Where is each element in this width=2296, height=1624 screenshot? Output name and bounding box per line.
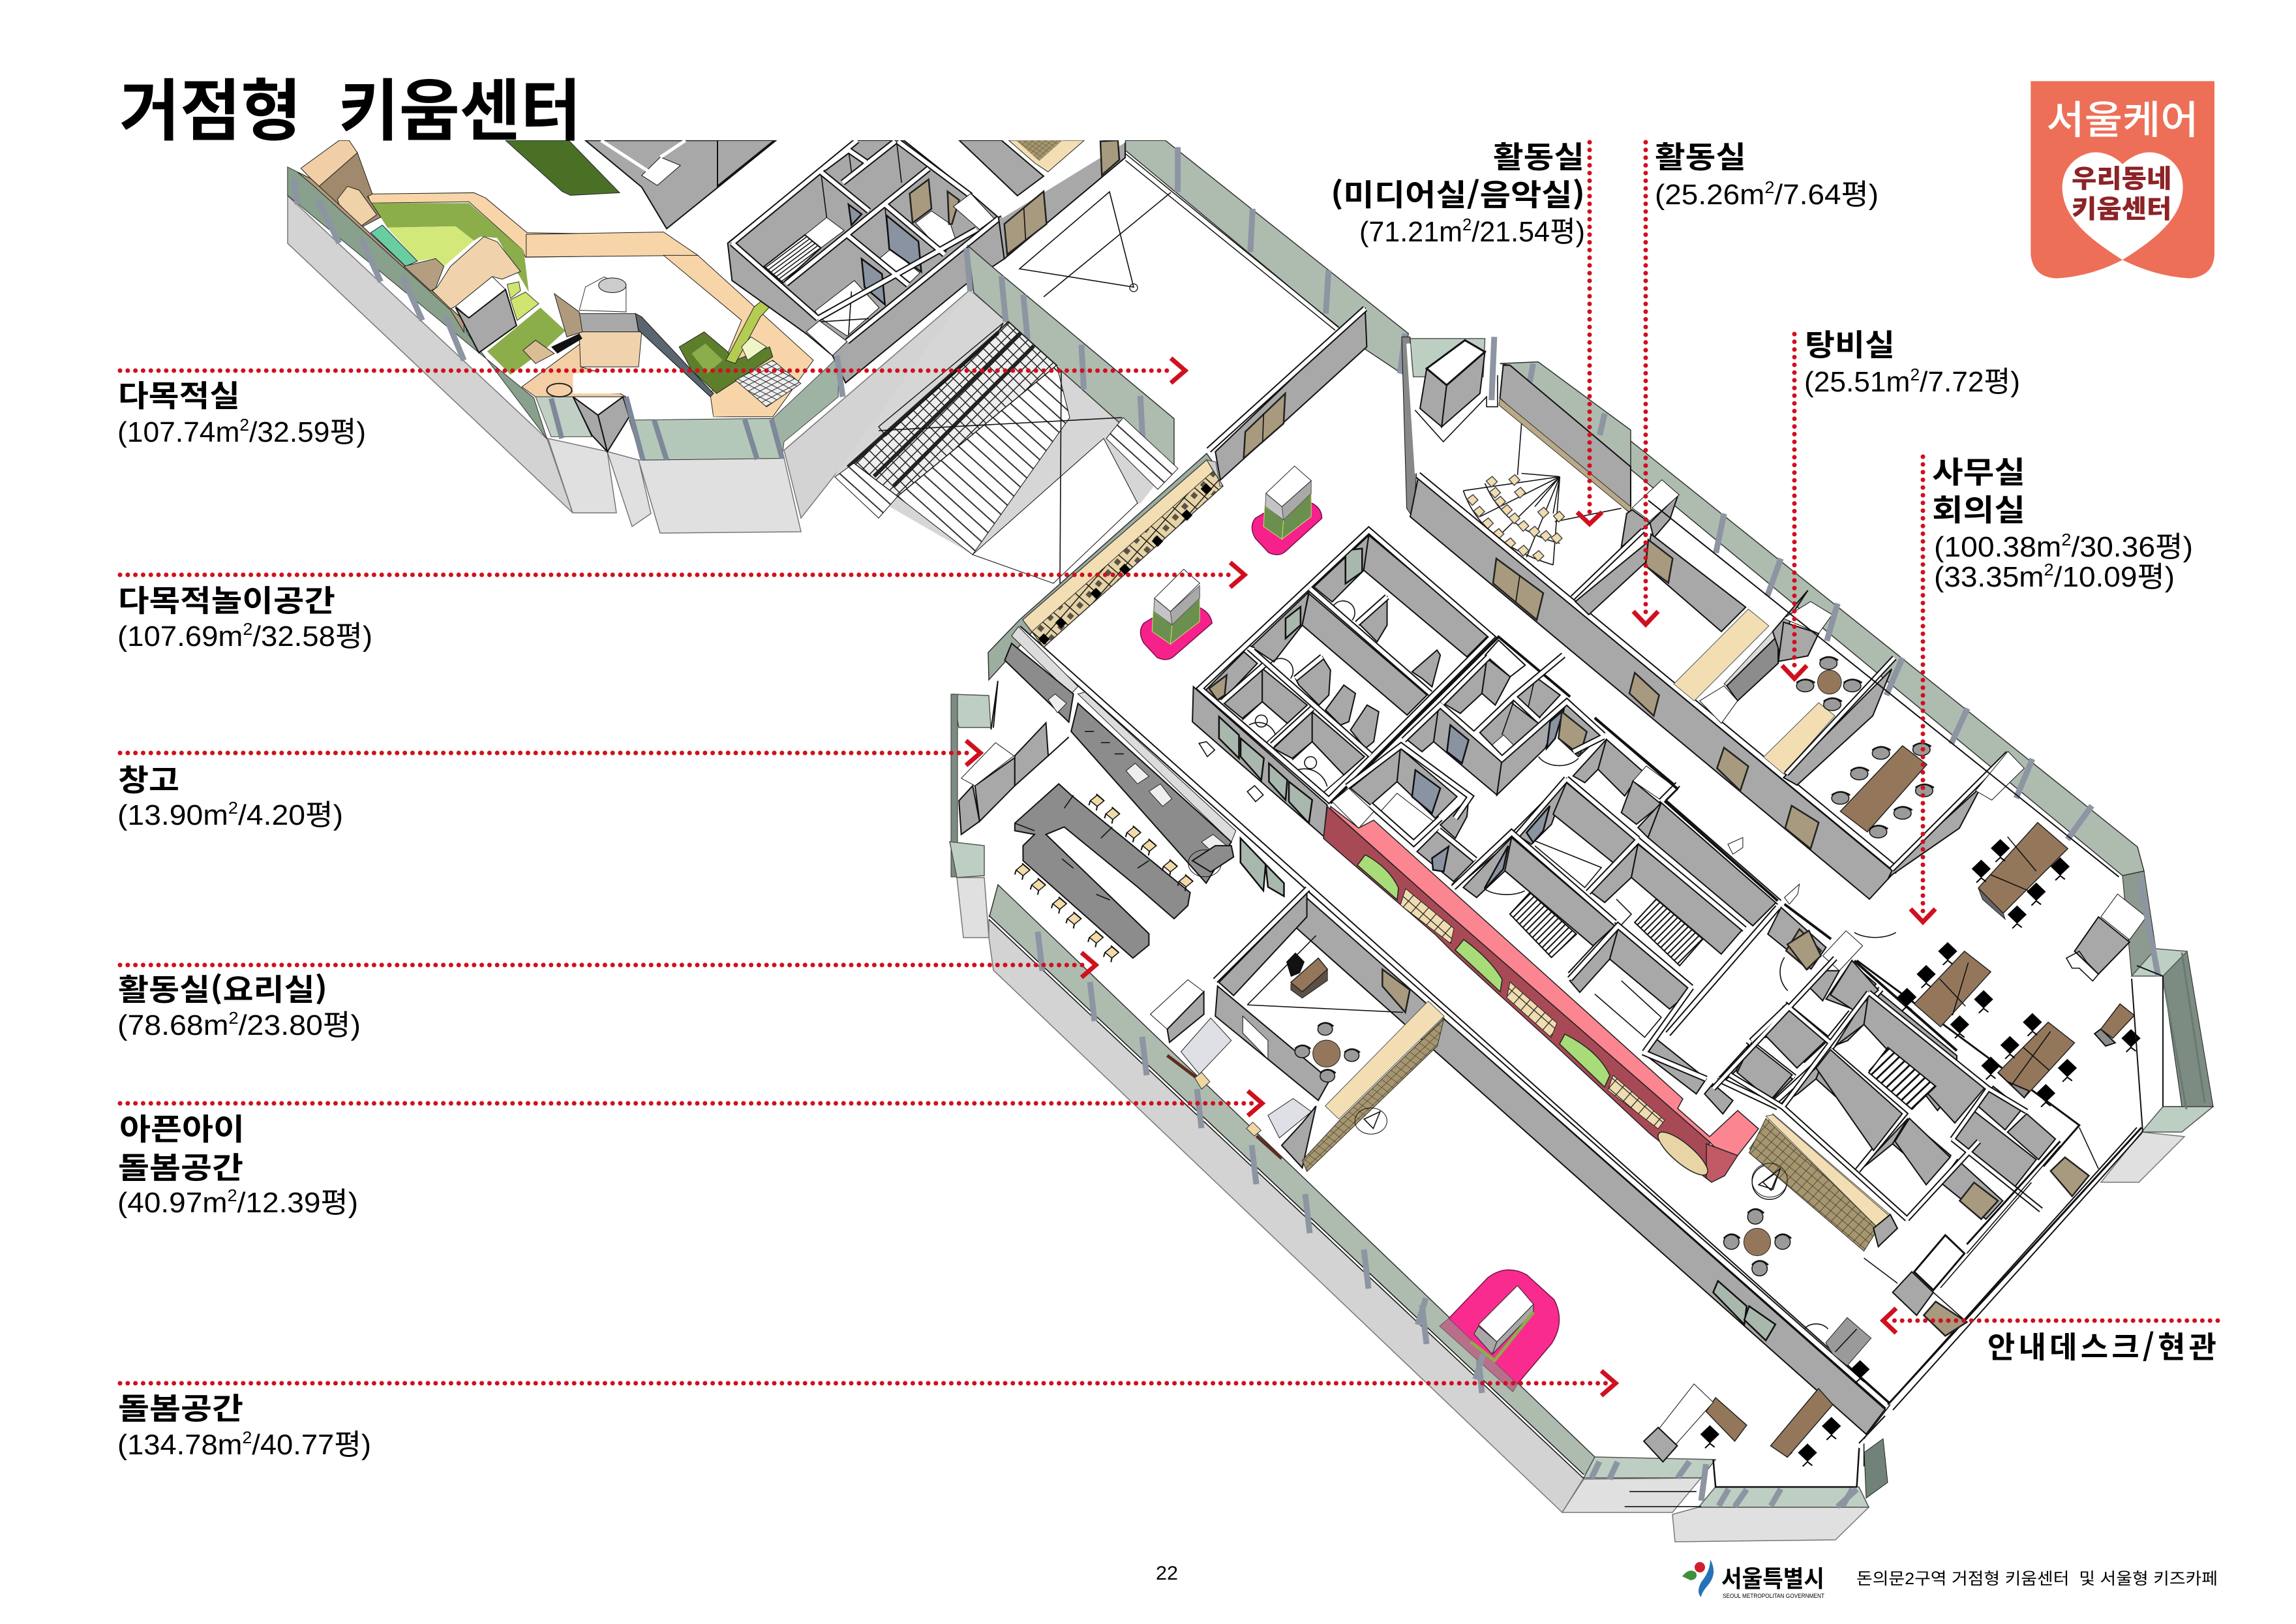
label: 창고: 창고 [118, 757, 179, 800]
label: 다목적놀이공간: 다목적놀이공간 [118, 577, 335, 620]
label: 활동실 미디어실 음악실: (미디어실/음악실) [1331, 172, 1585, 215]
logo: 서울케어 우리동네 키움센터 [2031, 81, 2214, 279]
arrow: 미디어실 [1577, 142, 1602, 524]
footer caption: 돈의문2구역 거점형 키움센터 및 서울형 키즈카페 [1856, 1570, 2218, 1588]
label: 돌봄공간 [117, 1385, 371, 1461]
kitchen activity room: counters, island, chairs [959, 626, 1284, 962]
page number: 22 [1156, 1563, 1178, 1584]
logo: 서울특별시: 서울특별시 [1721, 1560, 1824, 1594]
logo: 서울케어 우리동네 키움센터: 우리동네 [2072, 158, 2171, 195]
core: restrooms block [1192, 530, 1492, 836]
upper void side: glass band and partition wall [1126, 140, 1631, 565]
label: 탕비실: 탕비실 [1805, 322, 1895, 365]
pink play pillars [1140, 466, 1322, 660]
label: 사무실 회의실: 회의실 [1932, 487, 2025, 530]
label: 아픈아이 돌봄공간: (40.97m [117, 1187, 222, 1219]
label: 탕비실 [1804, 322, 2020, 398]
label: 돌봄공간: 돌봄공간 [118, 1385, 243, 1428]
stair-room floor markings [1020, 192, 1171, 297]
long corridor wall and double-door [1018, 475, 1898, 1434]
playground room: wooden structure, greens and peach floor [288, 140, 620, 439]
label: 안내데스크/현관: 안내데스크/현관 [1987, 1324, 2216, 1367]
label: 다목적놀이공간: (107.69m [117, 620, 239, 652]
label: 창고: /4.20평) [238, 799, 343, 831]
office, lobby, reception [1609, 823, 2158, 1507]
label: 사무실 회의실: 2 [2061, 530, 2072, 549]
arrow: 아픈아이 돌봄공간 [120, 1091, 1262, 1116]
label: 활동실(요리실): (78.68m [117, 1009, 222, 1041]
label: 사무실 회의실: (100.38m [1934, 531, 2055, 563]
playground central structure: tube slide, panels, grid [522, 140, 838, 460]
label: 사무실 회의실: 2 [2044, 560, 2054, 579]
label: 아픈아이 돌봄공간: 돌봄공간 [118, 1144, 243, 1187]
label: 활동실: 2 [1764, 177, 1774, 197]
label: 다목적놀이공간: 2 [243, 619, 252, 639]
label: 사무실 회의실: 사무실 [1932, 449, 2025, 492]
label: 다목적실: 2 [239, 415, 249, 435]
label: 활동실 미디어실 음악실: 활동실 [1493, 134, 1584, 177]
label: 다목적실: 다목적실 [118, 373, 240, 416]
upper rest rooms and stairs block [718, 140, 1174, 472]
label: 돌봄공간: /40.77평) [252, 1429, 371, 1461]
label: 활동실(요리실): 활동실(요리실) [118, 966, 327, 1009]
label: 창고: 2 [228, 798, 238, 818]
arrow: 사무실 회의실 [1911, 457, 1935, 922]
label: 탕비실: (25.51m [1804, 366, 1909, 398]
bookshelf wall beside hall [1023, 460, 1223, 647]
label: 활동실: (25.26m [1655, 179, 1760, 211]
label: 다목적실: (107.74m [117, 416, 239, 448]
label: 아픈아이 돌봄공간 [117, 1106, 358, 1219]
core: stair rooms [1453, 718, 1957, 1240]
arrow: 활동실 요리실 [120, 953, 1096, 977]
label: 탕비실: 2 [1910, 365, 1920, 384]
logo: 서울케어 우리동네 키움센터: 키움센터 [2072, 189, 2171, 226]
label: 사무실 회의실: (33.35m [1934, 561, 2039, 593]
label: 돌봄공간: 2 [242, 1428, 252, 1447]
logo: 서울특별시 [1682, 1559, 1824, 1599]
label: 사무실 회의실: /10.09평) [2054, 561, 2175, 593]
logo: 서울케어 우리동네 키움센터: 서울케어 [2046, 89, 2199, 146]
label: 돌봄공간: (134.78m [117, 1429, 239, 1461]
right glass mullions [2132, 953, 2205, 1132]
arrow: 탕비실 [1782, 334, 1807, 679]
arrow: 다목적실 [120, 358, 1185, 383]
title: 거점형 키움센터 [119, 57, 581, 154]
label: 아픈아이 돌봄공간: 아픈아이 [119, 1106, 245, 1149]
arrow: 안내데스크 현관 [1883, 1308, 2218, 1333]
arrow: 활동실 [1633, 142, 1658, 624]
label: 활동실(요리실) [117, 966, 361, 1041]
floor plan: isometric axonometric view [288, 140, 2213, 1542]
pink feature wall with arches and shelves [1323, 806, 1759, 1182]
label: 활동실 [1655, 134, 1879, 211]
media room second room and tea room and meeting room [1573, 480, 2119, 877]
label: 탕비실: /7.72평) [1920, 366, 2020, 398]
label: 활동실: /7.64평) [1774, 179, 1879, 211]
label: 아픈아이 돌봄공간: /12.39평) [237, 1187, 358, 1219]
core: centre rooms [1331, 637, 1678, 975]
label: 창고 [117, 757, 343, 831]
label: 창고: (13.90m [117, 799, 222, 831]
label: 다목적놀이공간 [117, 577, 372, 652]
label: 사무실 회의실 [1932, 449, 2193, 593]
arrow: 다목적놀이공간 [120, 562, 1245, 587]
arrow: 창고 [120, 741, 980, 765]
label: 활동실(요리실): 2 [228, 1008, 239, 1028]
main stairs with gridded tread mesh over void [835, 322, 1178, 583]
big pink play structure in care room [1417, 1270, 1559, 1392]
arrow: 돌봄공간 [120, 1371, 1616, 1396]
sick child care room: beds, desk, round table [1151, 889, 1444, 1172]
label: 활동실 미디어실 음악실: (71.21m [1359, 216, 1464, 248]
label: 다목적놀이공간: /32.58평) [252, 620, 372, 652]
label: 사무실 회의실: /30.36평) [2072, 531, 2193, 563]
label: 다목적실 [117, 373, 366, 448]
label: 활동실(요리실): /23.80평) [239, 1009, 361, 1041]
label: 다목적실: /32.59평) [249, 416, 366, 448]
logo: 서울특별시: SEOUL METROPOLITAN GOVERNMENT [1723, 1593, 1824, 1599]
label: 활동실: 활동실 [1655, 134, 1746, 177]
label: 활동실 미디어실 음악실: /21.54평) [1472, 216, 1585, 248]
building facade and exterior glass [288, 196, 2213, 1542]
label: 활동실 미디어실 음악실 [1331, 134, 1585, 248]
label: 활동실 미디어실 음악실: 2 [1462, 215, 1472, 234]
label: 아픈아이 돌봄공간: 2 [228, 1186, 237, 1205]
